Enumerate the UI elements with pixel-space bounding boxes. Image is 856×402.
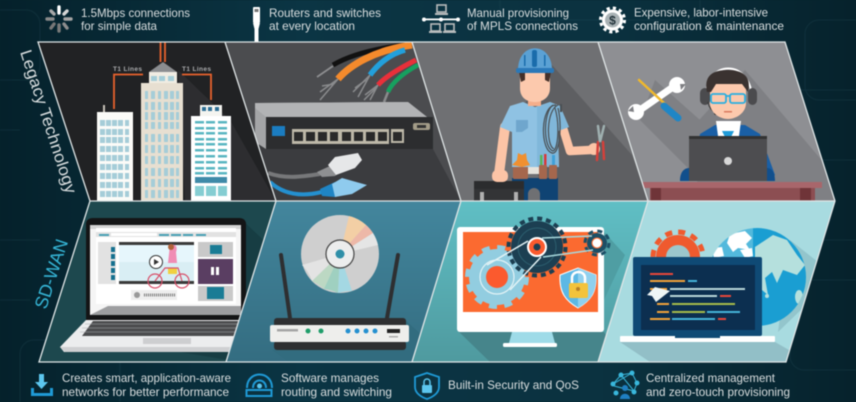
orange gear: [653, 232, 703, 282]
panel: legacy 1 buildings: [38, 42, 276, 203]
icon: security shield: [415, 373, 439, 399]
disc: [301, 215, 379, 293]
screen content: [96, 228, 236, 304]
laptop: [60, 218, 262, 352]
icon: ethernet plug: [253, 7, 260, 42]
bottom caption row: [31, 370, 790, 399]
building: right: [191, 105, 231, 202]
agent: [643, 68, 822, 202]
ethernet cables: [268, 153, 367, 197]
top caption row: [47, 5, 784, 42]
icon: software dome: [246, 374, 272, 396]
top caption row: for simple data: [81, 19, 157, 33]
network switch: [255, 102, 433, 149]
panel: legacy 3 technician: [412, 42, 648, 202]
caption: software manages: Software manages: [281, 371, 379, 385]
top caption row: of MPLS connections: [467, 19, 578, 33]
headset: [706, 66, 752, 90]
neck and face: [527, 100, 542, 107]
top caption row: configuration & maintenance: [634, 19, 784, 33]
router: [270, 255, 409, 350]
T1 lines: [114, 42, 211, 109]
jacket: [699, 124, 776, 176]
shield with padlock: [560, 268, 596, 308]
caption: expensive configuration: Expensive, labor-intensive: [634, 6, 768, 20]
caption: 1.5Mbps connections: 1.5Mbps connections: [81, 6, 190, 20]
label: T1 Lines: [113, 66, 211, 73]
helmet: [518, 48, 552, 70]
panel: sdwan 1 laptop: [39, 201, 290, 362]
technician: [474, 48, 604, 202]
cable coil: [543, 104, 561, 153]
pliers: [597, 126, 604, 160]
icon: dollar gear: [600, 8, 624, 32]
label: Legacy Technology: Legacy Technology: [16, 48, 80, 197]
cursor arrow: [647, 287, 670, 302]
caption: application-aware: Creates smart, application-aware: [62, 371, 231, 385]
label: T1 Lines: T1 Lines: [113, 66, 142, 73]
globe: [700, 220, 813, 335]
code lines: [650, 273, 731, 320]
cables: [317, 44, 418, 102]
shirt: [500, 102, 569, 167]
glasses: [711, 94, 745, 103]
legs: [512, 178, 558, 201]
bottom caption row: and zero-touch provisioning: [646, 385, 790, 399]
keyboard base: [60, 320, 262, 352]
toolbox: [474, 188, 524, 201]
panel: legacy 2 switch and cables: [225, 42, 461, 201]
tool belt: [513, 167, 528, 179]
arms: [499, 127, 505, 174]
chevron outlines: [38, 42, 835, 362]
icon: download: [31, 374, 53, 396]
caption: manual provisioning: Manual provisioning: [467, 6, 569, 20]
gears: [468, 218, 609, 306]
laptop: [689, 136, 767, 181]
icon: network computers: [422, 5, 460, 33]
icon: connection spinner: [47, 7, 71, 31]
monitor: [457, 227, 604, 347]
caption: security and QoS: Built-in Security and QoS: [448, 378, 579, 392]
bottom caption row: networks for better performance: [62, 385, 229, 399]
label: SD-WAN: SD-WAN: [31, 237, 72, 311]
icon: dollar gear: $: [609, 14, 616, 28]
caption: centralized management: Centralized management: [646, 371, 776, 385]
tools: wrench and screwdriver: [628, 77, 686, 120]
bottom caption row: routing and switching: [281, 385, 392, 399]
laptop with code: [620, 257, 775, 342]
panel: sdwan 3 security monitor: [412, 201, 648, 362]
building: left: [97, 105, 133, 202]
icon: centralized network: [610, 370, 640, 399]
desk: [650, 188, 815, 202]
face: [710, 80, 746, 119]
label: T1 Lines: T1 Lines: [182, 66, 211, 73]
panel: sdwan 2 disc and router: [226, 201, 461, 370]
panel: legacy 4 support agent: [598, 42, 835, 202]
building: center tower: [141, 62, 183, 203]
top caption row: at every location: [269, 19, 355, 33]
panel: sdwan 4 provisioning laptop: [598, 201, 835, 362]
caption: routers and switches: Routers and switches: [269, 6, 381, 20]
